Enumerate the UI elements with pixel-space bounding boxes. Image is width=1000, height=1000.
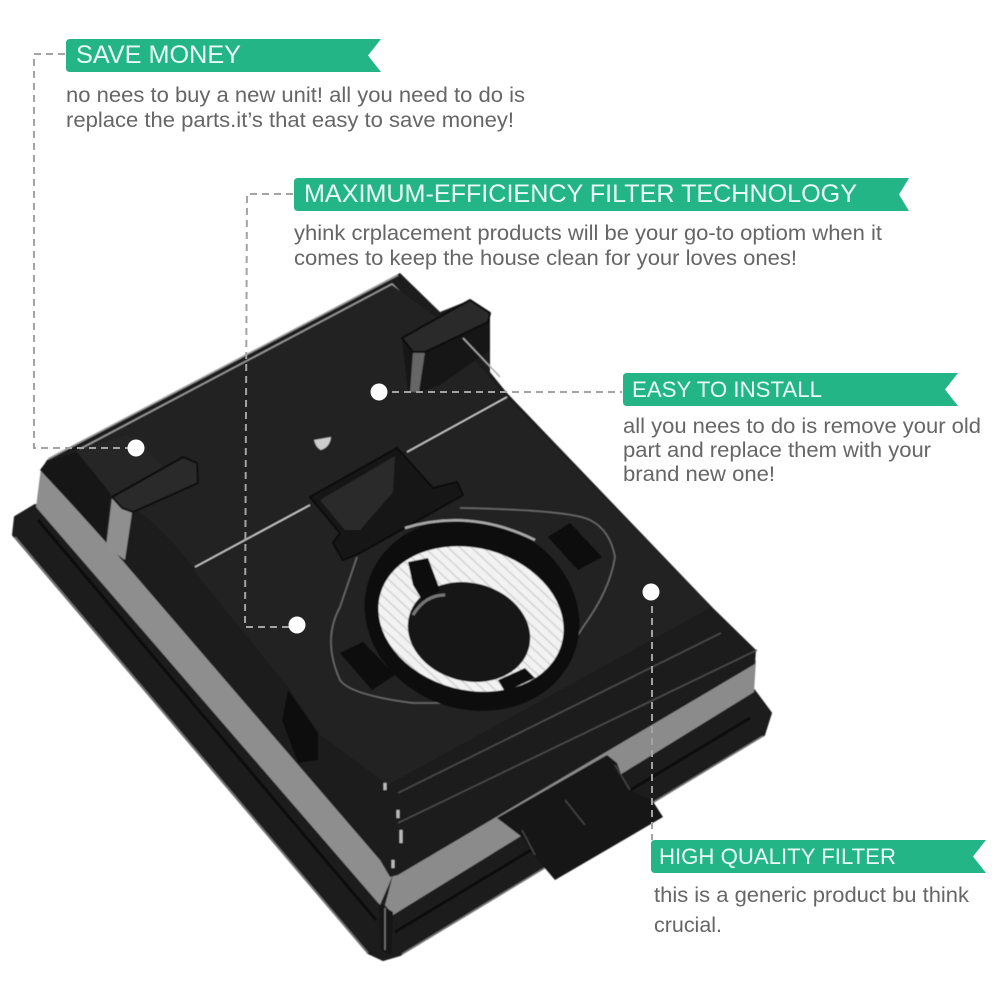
small peg — [314, 437, 331, 450]
leader: high quality filter — [651, 606, 653, 840]
banner — [66, 39, 381, 72]
leader: filter technology — [245, 194, 293, 627]
corner post — [379, 904, 393, 955]
pull tab — [497, 755, 663, 880]
left tab back block — [77, 435, 180, 515]
heading: MAXIMUM-EFFICIENCY FILTER TECHNOLOGY — [304, 180, 857, 208]
rim groove lines — [38, 520, 750, 932]
grey wall: right side — [385, 660, 756, 915]
body text: no nees to buy a new unit! all you need to do is — [66, 84, 525, 107]
body text: all you nees to do is remove your old — [623, 415, 981, 438]
corner post highlight — [384, 908, 386, 950]
flange outline — [331, 508, 615, 703]
body text: replace the parts.it’s that easy to save money! — [66, 109, 514, 132]
body text: this is a generic product bu think — [654, 884, 970, 907]
handle box — [310, 448, 463, 560]
pull tab creases — [522, 765, 630, 855]
left tab dark recess — [40, 452, 110, 540]
dot: filter technology — [288, 616, 306, 634]
right tab top — [402, 300, 490, 352]
left tab top — [112, 457, 198, 512]
right tab edge highlight — [463, 338, 500, 377]
base rim — [13, 505, 771, 960]
body text: brand new one! — [623, 463, 775, 486]
lower disc arm — [498, 668, 535, 692]
top rim highlights — [48, 275, 438, 459]
side notch — [282, 690, 318, 763]
banner — [623, 373, 958, 406]
banner — [294, 178, 909, 211]
lower plate — [193, 397, 712, 785]
disc arm — [408, 558, 440, 605]
right tab shadow — [402, 300, 490, 392]
main body — [41, 273, 756, 877]
heading: SAVE MONEY — [76, 41, 241, 69]
product: filter cartridge — [13, 273, 771, 960]
dot: save money — [128, 440, 144, 456]
leader: easy to install — [392, 391, 622, 393]
filter media ring — [362, 526, 580, 712]
callout: maximum-efficiency filter technology — [294, 178, 909, 270]
upper plate — [79, 285, 505, 567]
rectangular hole: bottom left — [340, 642, 395, 690]
rim outer edge — [15, 537, 763, 954]
corner glints — [385, 783, 401, 868]
body text: yhink crplacement products will be your go-to optiom when it — [294, 222, 882, 245]
right tab front face — [410, 352, 425, 392]
dot: high quality filter — [642, 584, 660, 600]
callout: save money — [66, 39, 525, 132]
housing highlight — [405, 520, 535, 540]
disc glint — [413, 595, 445, 615]
filter housing — [337, 489, 607, 741]
handle inner — [320, 456, 395, 530]
callout: high quality filter — [651, 840, 986, 937]
rectangular hole: top right — [548, 523, 602, 570]
grey wall: left side — [36, 468, 393, 905]
left tab front face — [106, 497, 132, 560]
callout: easy to install — [623, 373, 981, 486]
banner — [651, 840, 986, 873]
dot: easy to install — [370, 384, 388, 400]
stepped ridges — [398, 633, 757, 823]
body text: part and replace them with your — [623, 439, 931, 462]
leader: save money — [34, 54, 128, 448]
plate seam highlight — [195, 397, 507, 567]
filter centre disc — [396, 569, 542, 695]
body text: comes to keep the house clean for your loves ones! — [294, 247, 797, 270]
body text: crucial. — [654, 914, 722, 937]
heading: EASY TO INSTALL — [632, 377, 822, 402]
heading: HIGH QUALITY FILTER — [659, 844, 896, 869]
